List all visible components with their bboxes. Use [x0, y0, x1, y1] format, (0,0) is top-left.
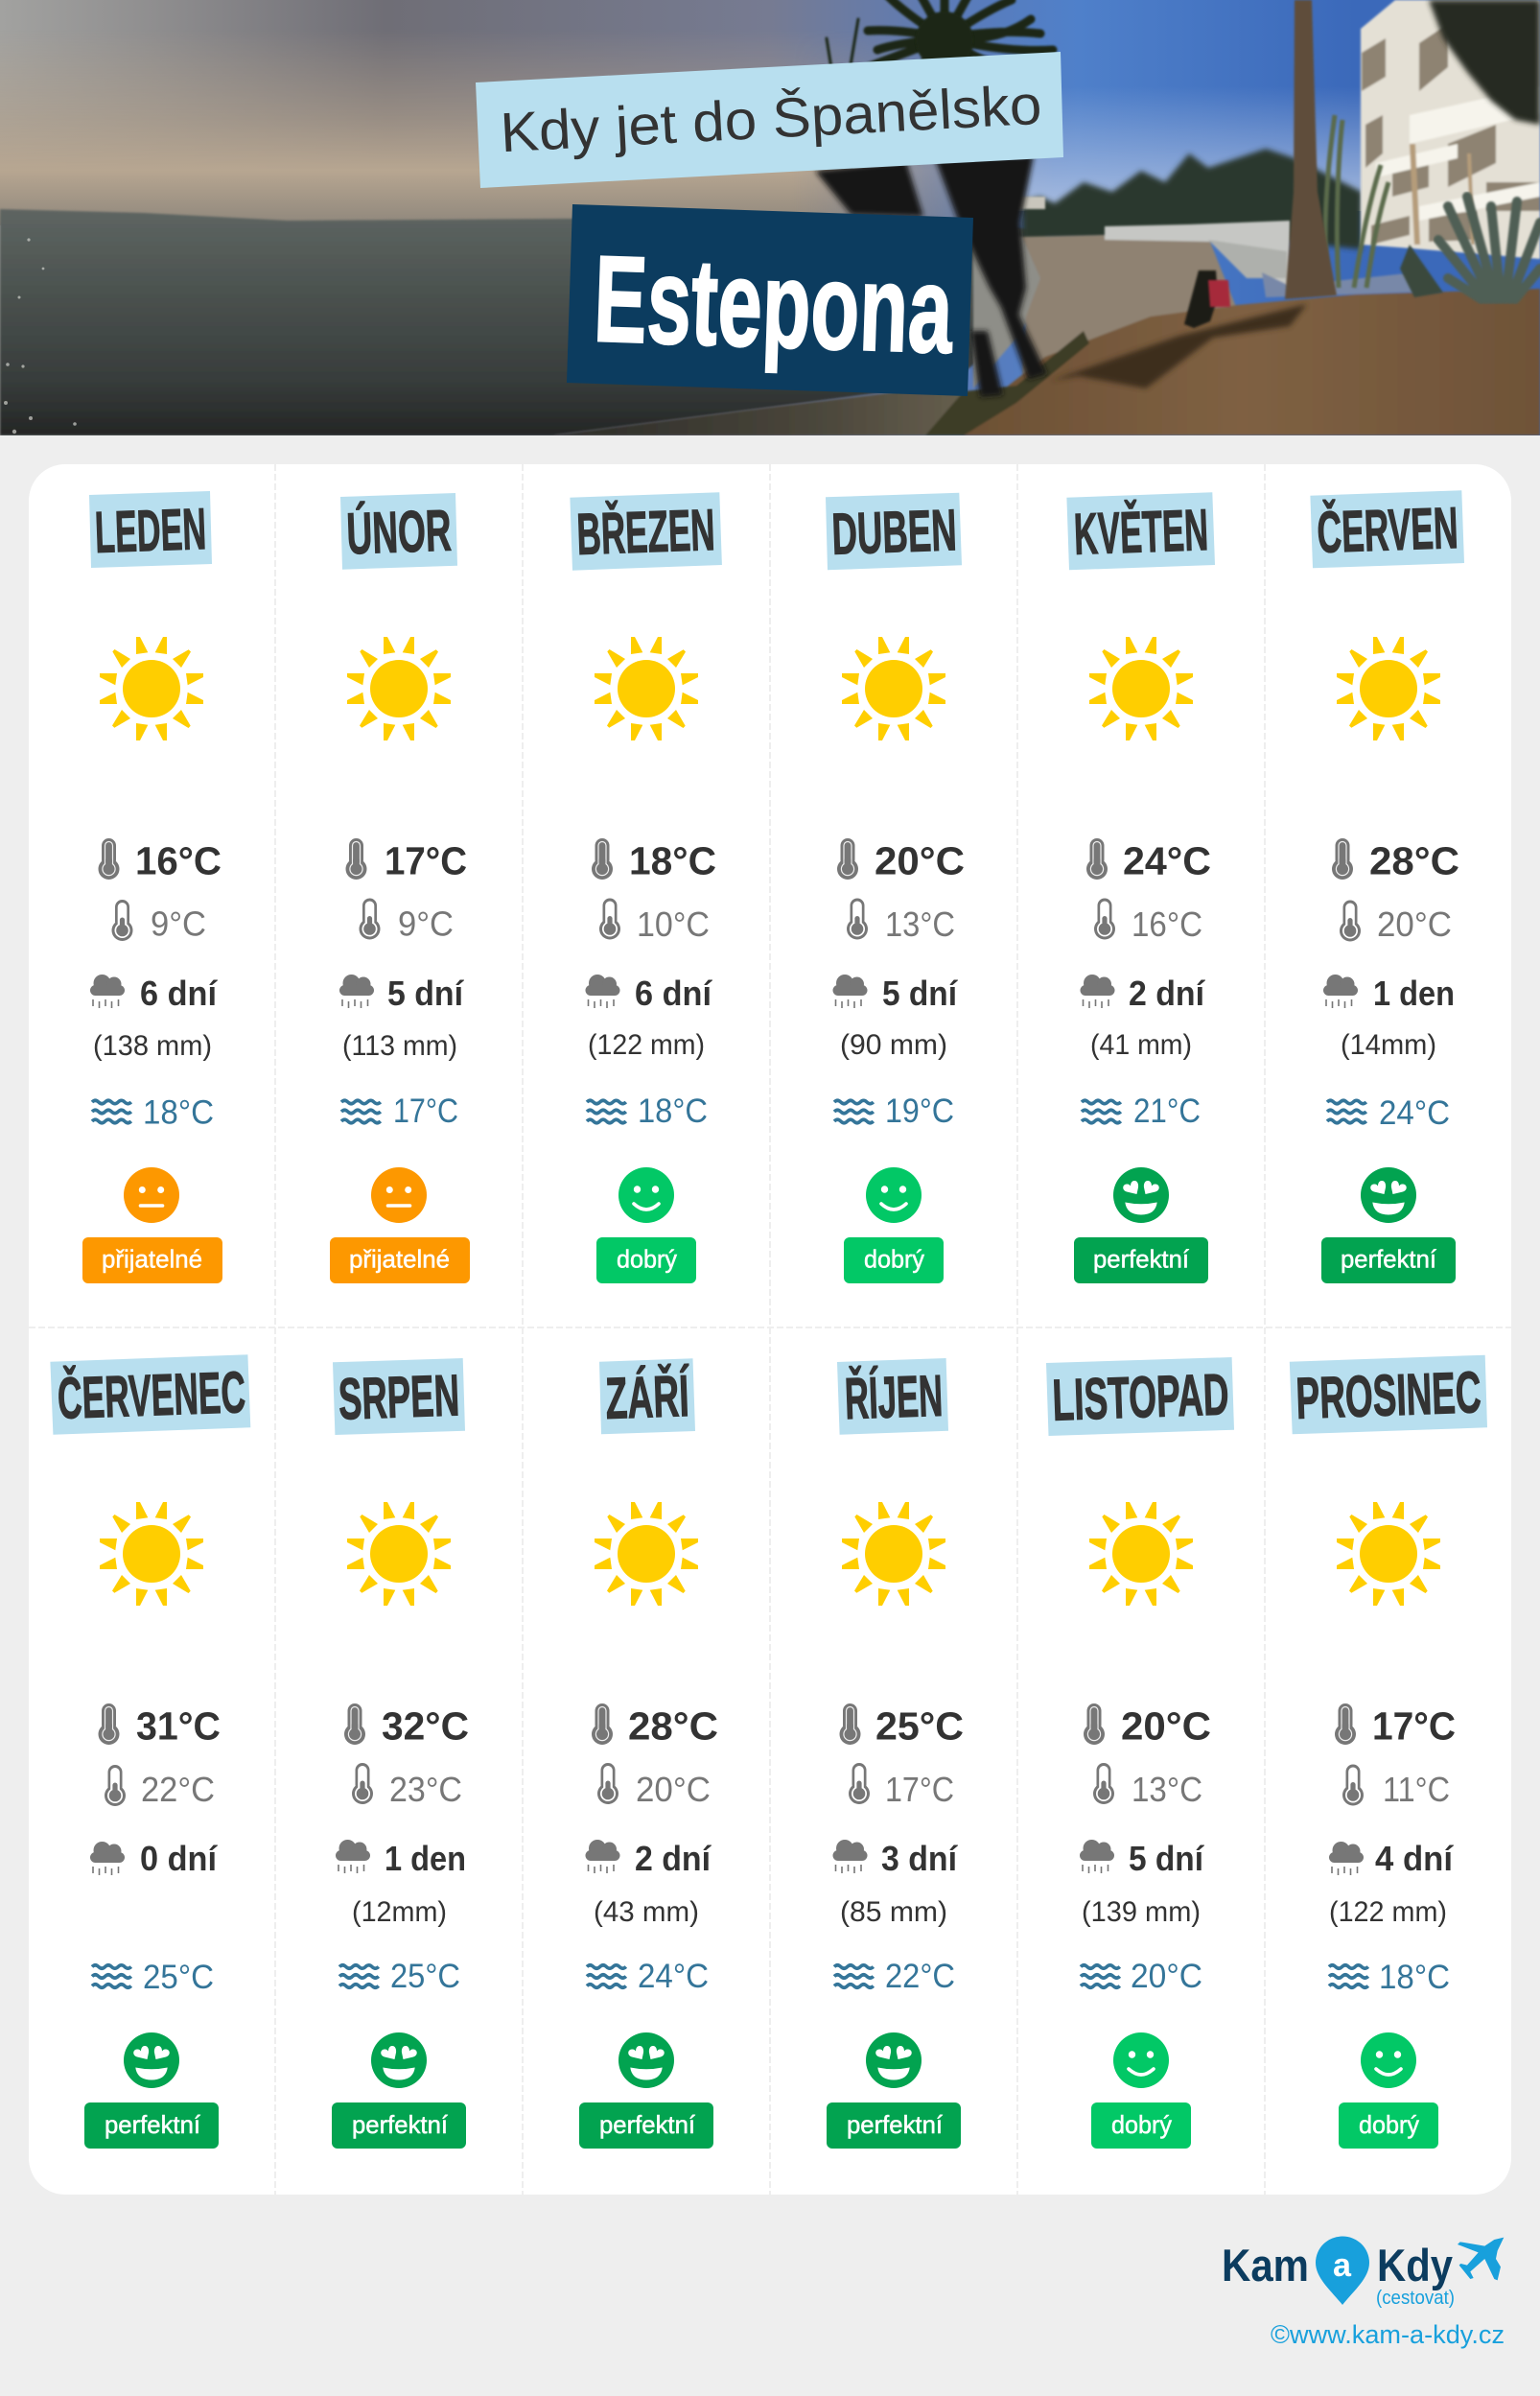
label: Duben: DUBEN — [830, 497, 958, 567]
rain — [1323, 974, 1455, 1061]
rating — [330, 1167, 470, 1283]
max temperature — [592, 838, 716, 882]
min temperature: 16°C — [1132, 904, 1202, 944]
max temperature: 17°C — [385, 838, 467, 882]
month: Březen — [570, 492, 722, 1283]
rating: perfektní — [1093, 1245, 1190, 1274]
website link: ©www.kam-a-kdy.cz — [1271, 2320, 1505, 2349]
title banner: Estepona: Estepona — [592, 230, 955, 380]
rating — [1339, 2032, 1438, 2149]
label: Leden: LEDEN — [94, 496, 207, 565]
rating: dobrý — [864, 1245, 924, 1274]
sea temperature: 18°C — [1379, 1959, 1450, 1996]
rating — [1074, 1167, 1208, 1283]
rain: (138 mm) — [93, 1030, 212, 1062]
rain: 0 dní — [140, 1839, 218, 1878]
max temperature — [345, 838, 467, 882]
rain: 5 dní — [1129, 1839, 1204, 1878]
rating — [82, 1167, 222, 1283]
icon: sun — [1337, 637, 1440, 740]
title banner: Kdy jet do Španělsko: Kdy jet do Španělsko — [499, 74, 1043, 164]
rain: 5 dní — [882, 974, 958, 1013]
max temperature: 32°C — [382, 1703, 469, 1748]
logo: Kam a Kdy: Kam — [1222, 2240, 1309, 2290]
max temperature — [98, 1703, 221, 1748]
sea temperature — [1082, 1092, 1201, 1130]
max temperature — [1086, 838, 1211, 882]
rating: dobrý — [617, 1245, 677, 1274]
month: Srpen — [332, 1358, 469, 2149]
month: Červen — [1310, 490, 1464, 1283]
panel: months card — [29, 464, 1511, 2195]
month: Duben — [826, 493, 965, 1283]
rating: přijatelné — [102, 1245, 202, 1274]
hero photo: Estepona coast — [0, 0, 1540, 435]
max temperature: 28°C — [1369, 838, 1459, 882]
rating: perfektní — [352, 2110, 449, 2139]
month: Květen — [1066, 492, 1215, 1283]
icon: sun — [1337, 1502, 1440, 1606]
label: Březen: BŘEZEN — [575, 497, 716, 567]
month: Září — [579, 1358, 718, 2149]
month: Leden — [82, 491, 222, 1283]
rain: (14mm) — [1341, 1029, 1436, 1061]
rain: (43 mm) — [594, 1896, 699, 1928]
rain: (41 mm) — [1090, 1029, 1192, 1061]
min temperature — [849, 1763, 954, 1809]
min temperature: 23°C — [389, 1770, 462, 1809]
sea temperature — [1329, 1959, 1450, 1996]
icon: sun — [595, 637, 698, 740]
title banner: Kdy jet do Španělsko — [476, 52, 1063, 188]
icon: sun — [347, 637, 451, 740]
max temperature — [98, 838, 222, 882]
label: Listopad — [1046, 1357, 1234, 1436]
label: Listopad: LISTOPAD — [1051, 1361, 1230, 1433]
rating: perfektní — [599, 2110, 696, 2139]
min temperature: 10°C — [637, 904, 710, 944]
label: Leden — [89, 491, 212, 568]
rain — [339, 974, 464, 1062]
rain — [585, 974, 712, 1061]
min temperature: 13°C — [1132, 1770, 1202, 1809]
rain: (85 mm) — [840, 1896, 947, 1928]
max temperature — [837, 838, 965, 882]
min temperature: 13°C — [885, 904, 955, 944]
sea temperature: 25°C — [390, 1958, 460, 1995]
rain — [1329, 1839, 1454, 1928]
rain — [90, 974, 218, 1062]
rating — [1321, 1167, 1456, 1283]
icon: sun — [842, 1502, 945, 1606]
rating: perfektní — [1341, 1245, 1437, 1274]
rain — [1080, 1839, 1204, 1928]
max temperature: 17°C — [1372, 1703, 1456, 1748]
sea temperature — [341, 1092, 458, 1130]
logo: Kam a Kdy: (cestovat) — [1376, 2288, 1455, 2309]
sea temperature — [834, 1958, 955, 1995]
icon: sun — [347, 1502, 451, 1606]
title banner: Estepona — [567, 204, 973, 396]
min temperature — [597, 1763, 711, 1809]
rating — [827, 2032, 961, 2149]
sea temperature: 19°C — [885, 1092, 954, 1130]
month: Prosinec — [1290, 1355, 1487, 2149]
max temperature — [592, 1703, 718, 1748]
label: Říjen — [837, 1358, 948, 1435]
label: Duben — [826, 493, 962, 570]
rain: 4 dní — [1375, 1839, 1454, 1878]
min temperature: 22°C — [141, 1770, 215, 1809]
sea temperature: 18°C — [638, 1092, 708, 1130]
rating: dobrý — [1111, 2110, 1172, 2139]
month: Červenec — [50, 1354, 250, 2149]
min temperature: 9°C — [398, 904, 454, 944]
rain: 1 den — [1373, 974, 1455, 1013]
label: Květen: KVĚTEN — [1073, 497, 1209, 567]
max temperature: 31°C — [136, 1703, 221, 1748]
rating: dobrý — [1359, 2110, 1419, 2139]
min temperature — [1094, 898, 1202, 944]
rain: 1 den — [385, 1839, 466, 1878]
label: Září — [599, 1358, 695, 1434]
max temperature: 24°C — [1123, 838, 1211, 882]
icon: sun — [1089, 1502, 1193, 1606]
sea temperature — [1327, 1094, 1450, 1132]
sea temperature — [92, 1959, 214, 1996]
label: Říjen: ŘÍJEN — [844, 1363, 944, 1431]
icon: map pin — [1316, 2237, 1369, 2305]
sea temperature: 17°C — [393, 1092, 458, 1130]
rain — [832, 974, 958, 1061]
max temperature — [1084, 1703, 1211, 1748]
month: Říjen — [827, 1358, 964, 2149]
min temperature: 20°C — [1377, 904, 1452, 944]
label: Srpen: SRPEN — [338, 1362, 460, 1432]
min temperature: 20°C — [636, 1770, 711, 1809]
rain: (12mm) — [352, 1896, 447, 1928]
max temperature: 20°C — [875, 838, 965, 882]
min temperature: 17°C — [885, 1770, 954, 1809]
min temperature: 11°C — [1383, 1770, 1450, 1809]
sea temperature — [92, 1093, 214, 1132]
max temperature: 20°C — [1121, 1703, 1211, 1748]
logo: Kam a Kdy — [1222, 2237, 1504, 2309]
label: Červenec: ČERVENEC — [57, 1359, 246, 1431]
rating: perfektní — [105, 2110, 201, 2139]
sea temperature: 20°C — [1131, 1958, 1202, 1995]
max temperature: 16°C — [135, 838, 222, 882]
max temperature — [344, 1703, 469, 1748]
max temperature — [840, 1703, 964, 1748]
min temperature — [1342, 1765, 1450, 1809]
rain: 6 dní — [635, 974, 712, 1013]
sea temperature: 21°C — [1133, 1092, 1201, 1130]
sea temperature: 25°C — [143, 1959, 214, 1996]
label: Květen — [1066, 492, 1215, 570]
icon: sun — [1089, 637, 1193, 740]
logo: Kam a Kdy: Kdy — [1377, 2240, 1453, 2290]
min temperature — [1340, 900, 1452, 944]
rain: (122 mm) — [588, 1029, 705, 1061]
rain: (122 mm) — [1329, 1896, 1447, 1928]
label: Srpen — [333, 1358, 465, 1435]
month: Únor — [330, 493, 470, 1283]
min temperature — [352, 1763, 462, 1809]
min temperature — [599, 898, 710, 944]
icon: map pin: a — [1333, 2247, 1352, 2284]
icon: sun — [842, 637, 945, 740]
label: Únor — [340, 493, 457, 570]
min temperature — [111, 900, 206, 944]
sea temperature: 18°C — [143, 1093, 214, 1132]
rating — [596, 1167, 696, 1283]
min temperature — [1093, 1763, 1202, 1809]
rating: přijatelné — [349, 1245, 450, 1274]
rain: 3 dní — [881, 1839, 958, 1878]
label: Červen — [1310, 490, 1464, 568]
rating — [844, 1167, 944, 1283]
rain — [336, 1839, 466, 1928]
rain: 6 dní — [140, 974, 218, 1013]
min temperature — [847, 898, 955, 944]
month: Listopad — [1046, 1357, 1234, 2149]
max temperature: 18°C — [629, 838, 716, 882]
min temperature: 9°C — [151, 904, 206, 944]
rain — [585, 1839, 712, 1928]
rain — [832, 1839, 958, 1928]
label: Únor: ÚNOR — [345, 498, 453, 566]
sea temperature: 24°C — [1379, 1094, 1450, 1132]
rating — [332, 2032, 466, 2149]
sea temperature — [587, 1092, 708, 1130]
sea temperature: 24°C — [638, 1958, 709, 1995]
sea temperature — [834, 1092, 954, 1130]
sea temperature: 22°C — [885, 1958, 955, 1995]
min temperature — [105, 1765, 215, 1809]
rain — [90, 1839, 218, 1878]
icon: plane — [1458, 2238, 1504, 2280]
rain: 2 dní — [635, 1839, 712, 1878]
sea temperature — [339, 1958, 460, 1995]
max temperature — [1335, 1703, 1456, 1748]
label: Červenec — [50, 1354, 250, 1435]
label: Září: ZÁŘÍ — [604, 1363, 691, 1431]
max temperature: 28°C — [628, 1703, 718, 1748]
rating — [1091, 2032, 1191, 2149]
icon: sun — [100, 1502, 203, 1606]
min temperature — [359, 898, 454, 944]
rain: (139 mm) — [1082, 1896, 1201, 1928]
rating — [84, 2032, 219, 2149]
icon: sun — [100, 637, 203, 740]
max temperature — [1332, 838, 1459, 882]
label: Březen — [570, 492, 722, 571]
rain: (90 mm) — [840, 1029, 947, 1061]
rain: 5 dní — [387, 974, 464, 1013]
rain: 2 dní — [1129, 974, 1205, 1013]
rating: perfektní — [847, 2110, 944, 2139]
sea temperature — [1081, 1958, 1202, 1995]
sea temperature — [587, 1958, 709, 1995]
rain: (113 mm) — [342, 1030, 457, 1062]
rating — [579, 2032, 713, 2149]
max temperature: 25°C — [875, 1703, 964, 1748]
rain — [1080, 974, 1205, 1061]
icon: sun — [595, 1502, 698, 1606]
